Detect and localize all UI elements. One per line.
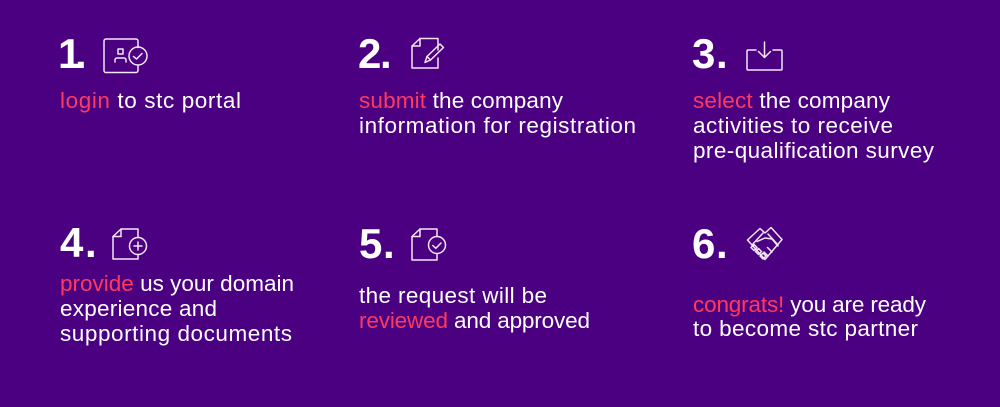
number 6: 6.: [692, 220, 728, 267]
number 4: 4.: [60, 219, 97, 266]
text: submit the company information: [359, 88, 636, 138]
panel: step 6: [692, 220, 927, 341]
text: congrats ready to become partner: [693, 292, 927, 341]
icon: document with check: [412, 229, 446, 260]
panel: step 5: [359, 220, 590, 333]
line 3: pre-qualification survey: [693, 138, 935, 163]
line 1: select the company: [693, 88, 891, 113]
icon: document with pen: [412, 38, 444, 68]
text: request reviewed and approved: [359, 283, 590, 333]
line 2: activities to receive: [693, 113, 893, 138]
icon: document with plus: [113, 229, 146, 259]
panel: step 3: [692, 30, 935, 163]
line 2: experience and: [60, 296, 217, 321]
number 2: 2.: [358, 30, 392, 77]
number 1: 1.: [58, 30, 87, 77]
line 1: provide us your domain: [60, 271, 294, 296]
text: provide domain experience: [60, 271, 294, 346]
icon: download to tray: [747, 42, 782, 70]
number 3: 3.: [692, 30, 728, 77]
line 3: supporting documents: [60, 321, 292, 346]
number 5: 5.: [359, 220, 395, 267]
line 1: submit the company: [359, 88, 564, 113]
line 2: reviewed and approved: [359, 308, 590, 333]
panel: step 4: [60, 219, 294, 346]
line 2: information for registration: [359, 113, 636, 138]
text: login to stc portal: login to stc portal: [60, 88, 241, 113]
panel: step 1: [58, 30, 241, 113]
panel: step 2: [358, 30, 636, 138]
line 2: to become stc partner: [693, 316, 918, 341]
icon: user profile with check: [104, 39, 147, 72]
icon: handshake: [748, 228, 782, 260]
text: select the company activities: [693, 88, 935, 163]
line 1: the request will be: [359, 283, 547, 308]
line 1: congrats! you are ready: [693, 292, 927, 317]
